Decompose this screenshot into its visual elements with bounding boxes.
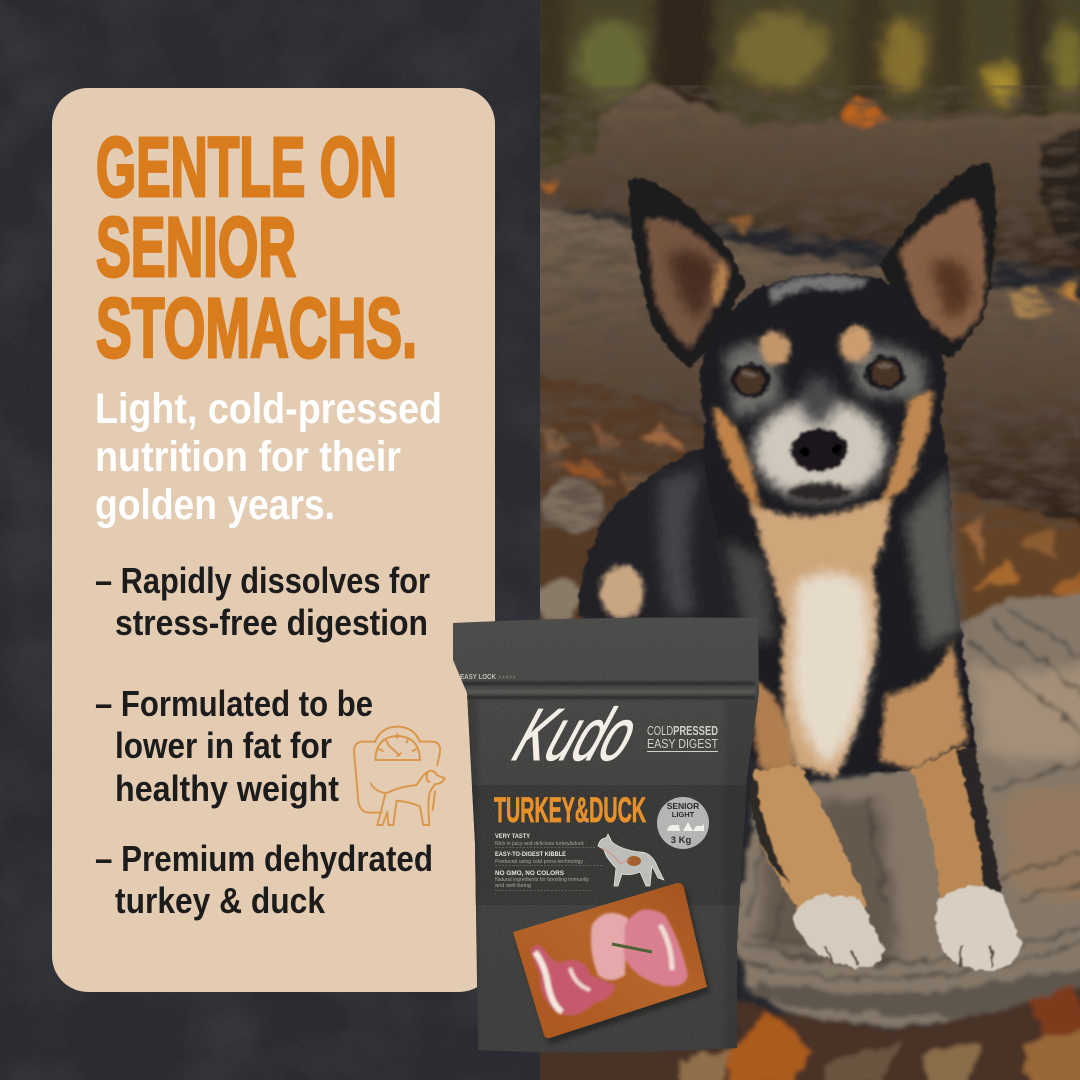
title: GENTLE ON [96,120,397,214]
bark texture [540,85,1080,530]
benefit: low fat: lower in fat for [115,725,332,766]
upper log [500,85,1080,280]
grey fur on flanks [905,470,962,650]
cutting board with meat [513,883,710,1043]
feature list: VERY TASTY [495,833,531,840]
easy lock label: EASY LOCK [460,672,496,681]
subheading: nutrition for their [95,433,401,481]
feature list: NO GMO, NO COLORS [495,870,565,877]
side shadows [468,700,477,968]
chalkboard background [0,0,540,1080]
benefit: dissolves: – Rapidly dissolves for [95,560,430,601]
product bag: Kudo Turkey & Duck [450,612,762,1060]
nose [791,428,847,472]
feature list: EASY-TO-DIGEST KIBBLE [495,851,567,858]
feature list [495,833,602,890]
eyes [730,356,905,398]
icon: dog on weighing scale [354,727,445,825]
title [96,120,417,375]
head [700,274,945,512]
Kudo logo: Kudo [503,694,649,776]
easy lock label: ››››› [498,672,517,681]
cold pressed tagline: COLDPRESSED [647,723,718,738]
ears [628,163,996,368]
cold pressed tagline [647,723,718,752]
zip lock seal [455,682,755,699]
dark label band [472,785,746,905]
blanket and leaf litter [500,595,1080,1080]
benefit: low fat: healthy weight [115,768,339,809]
title: SENIOR [96,200,296,294]
badge: senior light 3kg: SENIOR [667,801,699,811]
leaf ground [540,372,706,620]
tan cheeks [712,405,762,512]
benefit: dissolves: stress-free digestion [115,602,428,643]
muzzle [754,400,886,500]
main log [540,203,1080,525]
badge: senior light 3kg: LIGHT [672,810,695,819]
chest [748,495,890,778]
turkey breast [591,913,628,980]
tan brows [755,327,795,369]
benefit: premium protein: turkey & duck [115,880,326,921]
benefit: dissolves [95,560,430,643]
badge: senior light 3kg [657,797,709,849]
benefit: premium protein [95,838,433,921]
subheading: golden years. [95,481,335,529]
duck breast [624,909,688,986]
subheading: Light, cold-pressed [95,385,442,433]
subheading [95,385,442,529]
rosemary sprig [612,944,652,952]
rear body [576,448,718,618]
panel: cream text card [52,88,495,992]
benefit: premium protein: – Premium dehydrated [95,838,433,879]
benefit: low fat: – Formulated to be [95,683,373,724]
feature list: Rich in juicy and delicious turkey&duck [495,841,585,847]
feature list: and well-being [495,883,531,889]
paws [792,886,1022,971]
photo: senior dog on a blanket among autumn logs [500,0,1080,1080]
dog [578,163,1022,971]
bag grain [450,612,762,1058]
torso [704,420,975,775]
front legs [751,745,1002,915]
drumstick [530,945,616,1015]
bag body [450,612,762,1058]
feature list: Natural ingredients for boosting immunity [495,877,590,883]
benefit: low fat [95,683,373,809]
forest and logs background [500,0,1080,640]
title: STOMACHS. [96,281,417,375]
feature list: Produced using cold press technology [495,859,584,865]
dog anatomy illustration [598,834,664,886]
badge: senior light 3kg: 3 Kg [671,835,691,846]
tan hips [753,680,795,770]
Turkey and Duck product name: TURKEY&DUCK [494,791,646,830]
cold pressed tagline: EASY DIGEST [647,736,718,751]
